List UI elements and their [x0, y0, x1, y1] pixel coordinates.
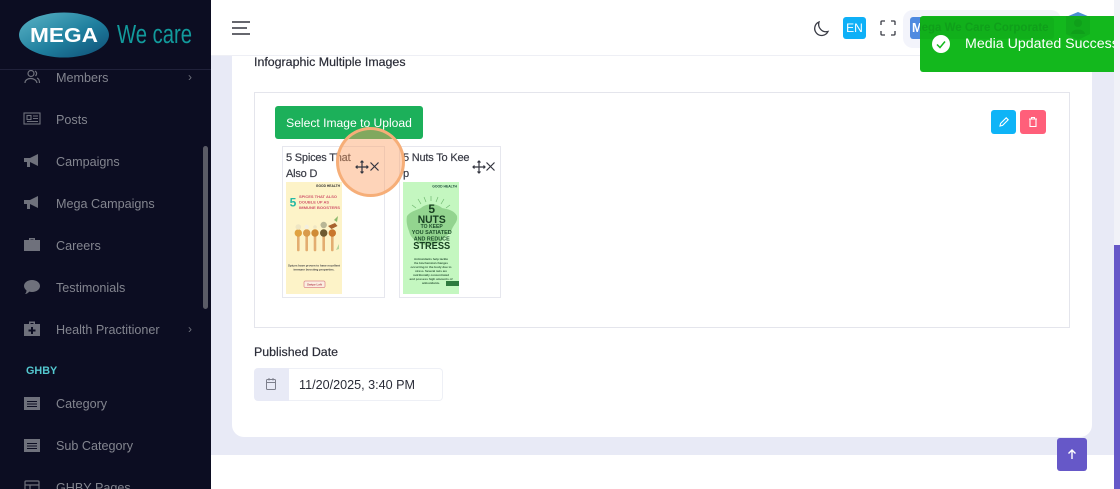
- thumbnail: 5 spices infographic: GOOD HEALTH: [316, 184, 341, 188]
- chevron: ›: [188, 322, 192, 336]
- button: delete: [1020, 110, 1046, 134]
- icon: members: [24, 70, 40, 83]
- icon: calendar: [254, 368, 289, 401]
- icon: moon: [814, 20, 830, 36]
- icon: move handle 2: [472, 160, 486, 174]
- caption: spices: [286, 152, 351, 180]
- label: careers: Careers: [56, 239, 101, 253]
- panel: image item 1: [282, 146, 385, 298]
- panel: sidebar: [0, 0, 211, 489]
- caption: nuts: [403, 152, 470, 180]
- icon: briefcase: [24, 238, 40, 251]
- thumbnail: 5 nuts infographic: occurring in the body due to: [410, 265, 452, 269]
- icon: medical bag: [24, 322, 40, 336]
- icon: posts: [23, 112, 41, 125]
- thumbnail: 5 nuts infographic: TO KEEP: [421, 224, 443, 230]
- label: mega campaigns: Mega Campaigns: [56, 197, 155, 211]
- label: health practitioner: Health Practitioner: [56, 323, 160, 337]
- thumbnail: 5 nuts infographic: STRESS: [413, 241, 450, 252]
- avatar: [1068, 12, 1088, 16]
- account badge: [910, 17, 934, 39]
- thumbnail: 5 nuts infographic: stress. Several nuts are: [415, 269, 447, 273]
- thumbnail: 5 spices infographic: Swipe Left: [307, 282, 322, 286]
- heading: infographic multiple images: Infographic Multiple Images: [254, 55, 406, 69]
- icon: list: [24, 439, 40, 452]
- thumbnail: 5 spices infographic: immune boosting properties.: [294, 268, 335, 272]
- label: members: Members: [56, 71, 108, 85]
- thumbnail: 5 nuts infographic: NUTS: [418, 214, 446, 226]
- icon: fullscreen: [880, 20, 896, 36]
- menu item: sub category: [24, 439, 133, 453]
- button: edit: [991, 110, 1016, 134]
- date value: [289, 368, 443, 401]
- button: back to top: [1057, 438, 1087, 471]
- thumbnail: 5 nuts infographic: the biochemical changes: [414, 261, 448, 265]
- menu item: campaigns: [24, 154, 120, 169]
- thumbnail: 5 nuts infographic: and possess high amounts of: [410, 277, 452, 281]
- right scrollbar thumb: [1114, 245, 1120, 489]
- account button seen through toast: [910, 17, 1054, 39]
- thumbnail: 5 nuts infographic: antioxidants.: [422, 281, 440, 285]
- thumbnail: 5 spices infographic: SPICES THAT ALSO: [299, 195, 337, 199]
- menu item: posts: [23, 112, 88, 127]
- right scrollbar track: [1114, 0, 1120, 489]
- thumbnail: 5 nuts infographic: AND REDUCE: [414, 236, 450, 242]
- logo: MEGA We care: [19, 12, 192, 58]
- button: select image to upload: [275, 106, 423, 139]
- account badge: M: [912, 21, 922, 35]
- icon: megaphone: [24, 154, 38, 167]
- chevron: ›: [188, 70, 192, 84]
- label: testimonials: Testimonials: [56, 281, 125, 295]
- menu item: careers: [24, 238, 101, 253]
- thumbnail: 5 nuts infographic: [403, 182, 459, 294]
- icon: speech bubble: [24, 280, 40, 294]
- menu item: health practitioner: [24, 322, 192, 337]
- icon: hamburger menu: [232, 21, 250, 35]
- thumbnail: 5 spices infographic: 5: [290, 196, 297, 210]
- panel: image item 2: [399, 146, 501, 298]
- label: published date: Published Date: [254, 345, 338, 359]
- thumbnail: 5 spices infographic: Spices have proven to have excellent: [288, 264, 340, 268]
- icon: list: [24, 397, 40, 410]
- label: category: Category: [56, 397, 107, 411]
- thumbnail: 5 nuts infographic: YOU SATIATED: [412, 230, 452, 236]
- thumbnail: 5 nuts infographic: Antioxidants help tackle: [414, 257, 448, 261]
- logo bar: [0, 0, 211, 70]
- label: sub category: Sub Category: [56, 439, 133, 453]
- date field: [254, 368, 443, 401]
- label: posts: Posts: [56, 113, 88, 127]
- language button: [843, 17, 866, 39]
- caption: spices: Also D: [286, 168, 317, 180]
- avatar seen through toast: [1066, 16, 1090, 40]
- icon: close 1: [370, 162, 379, 171]
- thumbnail: 5 spices infographic: IMMUNE BOOSTERS: [299, 206, 341, 210]
- account selector: [903, 10, 1061, 48]
- thumbnail: 5 nuts infographic: 5: [428, 202, 435, 216]
- top header bar: [211, 0, 1114, 56]
- menu item: category: [24, 397, 107, 411]
- language button: EN: [846, 21, 863, 35]
- icon: move handle 1: [355, 160, 369, 174]
- label: campaigns: Campaigns: [56, 155, 120, 169]
- panel: upload box: [254, 92, 1070, 328]
- icon: close 2: [486, 162, 495, 171]
- menu item: members: [24, 70, 192, 85]
- menu item: mega campaigns: [24, 196, 155, 211]
- thumbnail: 5 nuts infographic: GOOD HEALTH: [432, 184, 458, 188]
- thumbnail: 5 nuts infographic: nutritionally concentrated: [413, 273, 449, 277]
- caption: nuts: p: [403, 168, 409, 180]
- button: select image to upload: Select Image to Upload: [286, 116, 412, 130]
- thumbnail: 5 spices infographic: DOUBLE UP AS: [299, 200, 329, 204]
- icon: success check: [932, 35, 950, 53]
- thumbnail: 5 spices infographic: [286, 182, 342, 294]
- section heading: GHBY: GHBY: [26, 365, 57, 377]
- logo: MEGA We care: We care: [117, 21, 192, 49]
- sidebar scrollbar: [203, 146, 208, 309]
- click highlight circle: [336, 127, 405, 197]
- toast: media updated: [920, 16, 1114, 72]
- page background: [211, 56, 1114, 455]
- panel: form card: [232, 40, 1092, 437]
- logo: MEGA We care: MEGA: [30, 25, 98, 47]
- date value: 11/20/2025, 3:40 PM: [299, 378, 415, 392]
- icon: layout: [24, 480, 40, 489]
- caption: nuts: 5 Nuts To Kee: [403, 152, 469, 164]
- icon: megaphone: [24, 196, 38, 209]
- caption: spices: 5 Spices That: [286, 152, 350, 164]
- menu item: GHBY pages: [24, 480, 131, 489]
- menu item: testimonials: [24, 280, 125, 295]
